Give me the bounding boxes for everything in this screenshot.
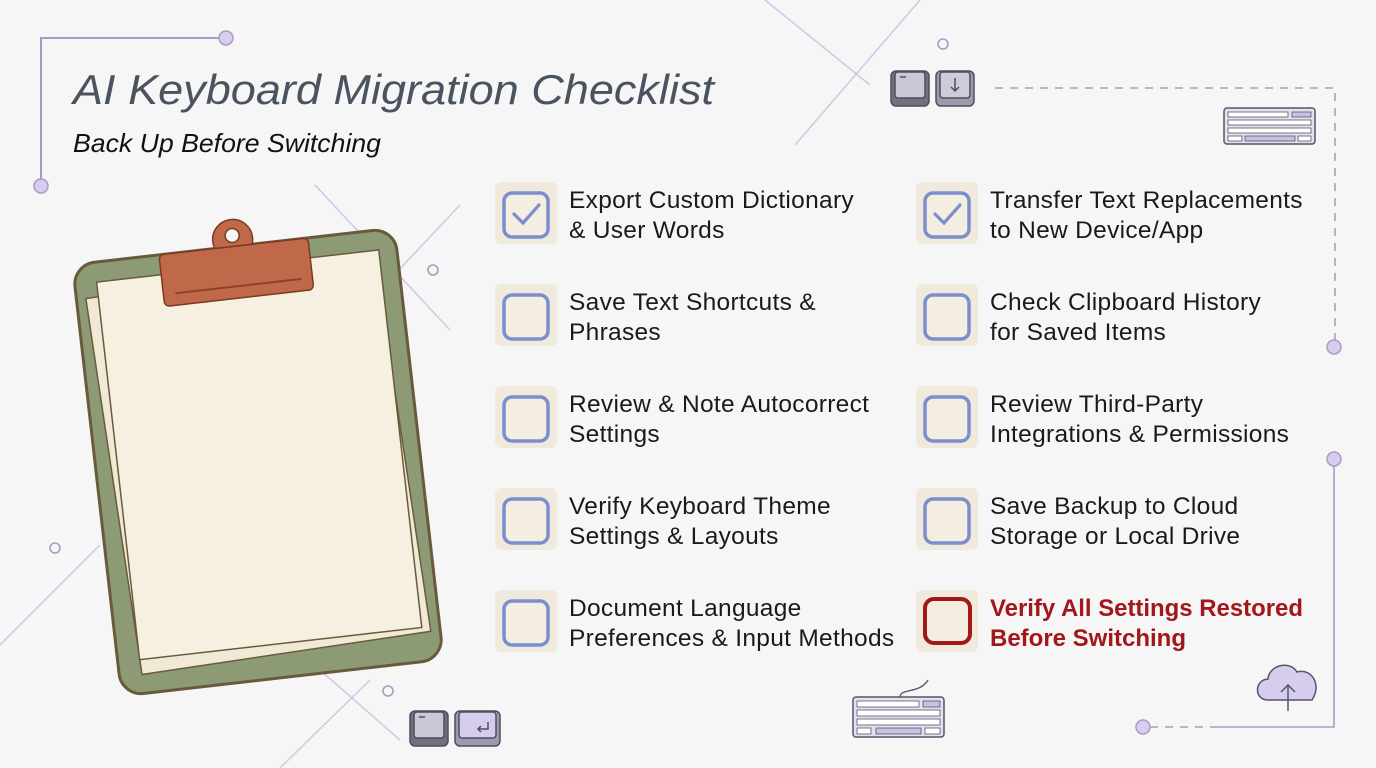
item 8: Review Third-Party xyxy=(990,391,1204,418)
item 8 xyxy=(916,386,1289,448)
item 6: to New Device/App xyxy=(990,217,1203,244)
icon: keyboard top right xyxy=(1224,108,1315,144)
icon: keyboard bottom xyxy=(853,680,944,737)
item 6: Transfer Text Replacements xyxy=(990,187,1303,214)
clip xyxy=(156,211,314,307)
item 10 (highlight): Verify All Settings Restored xyxy=(990,595,1303,622)
item 9: Storage or Local Drive xyxy=(990,523,1240,550)
item 10 (highlight): Before Switching xyxy=(990,625,1186,652)
item 1: Export Custom Dictionary xyxy=(569,187,854,214)
title: AI Keyboard Migration Checklist xyxy=(70,66,716,113)
item 5: Preferences & Input Methods xyxy=(569,625,894,652)
item 1: & User Words xyxy=(569,217,725,244)
item 3 xyxy=(495,386,869,448)
item 10 (highlight) xyxy=(916,590,1303,652)
checklist: left column xyxy=(495,182,894,652)
dashed connector: right xyxy=(995,88,1341,734)
icon: keycaps top xyxy=(891,71,974,106)
item 3: Review & Note Autocorrect xyxy=(569,391,869,418)
item 2: Phrases xyxy=(569,319,661,346)
item 2 xyxy=(495,284,816,346)
item 9: Save Backup to Cloud xyxy=(990,493,1238,520)
item 6 xyxy=(916,182,1303,244)
subtitle: Back Up Before Switching xyxy=(73,128,382,158)
icon: keycaps bottom xyxy=(410,711,500,746)
item 4 xyxy=(495,488,831,550)
item 7 xyxy=(916,284,1262,346)
item 2: Save Text Shortcuts & xyxy=(569,289,816,316)
item 5 xyxy=(495,590,894,652)
item 7: Check Clipboard History xyxy=(990,289,1262,316)
item 7: for Saved Items xyxy=(990,319,1166,346)
item 4: Verify Keyboard Theme xyxy=(569,493,831,520)
bracket: top-left xyxy=(34,31,233,193)
item 5: Document Language xyxy=(569,595,802,622)
icon: cloud upload xyxy=(1258,665,1316,711)
item 3: Settings xyxy=(569,421,660,448)
item 9 xyxy=(916,488,1240,550)
clipboard xyxy=(69,201,444,696)
item 1 xyxy=(495,182,854,244)
checklist: right column xyxy=(916,182,1303,652)
item 4: Settings & Layouts xyxy=(569,523,779,550)
item 8: Integrations & Permissions xyxy=(990,421,1289,448)
